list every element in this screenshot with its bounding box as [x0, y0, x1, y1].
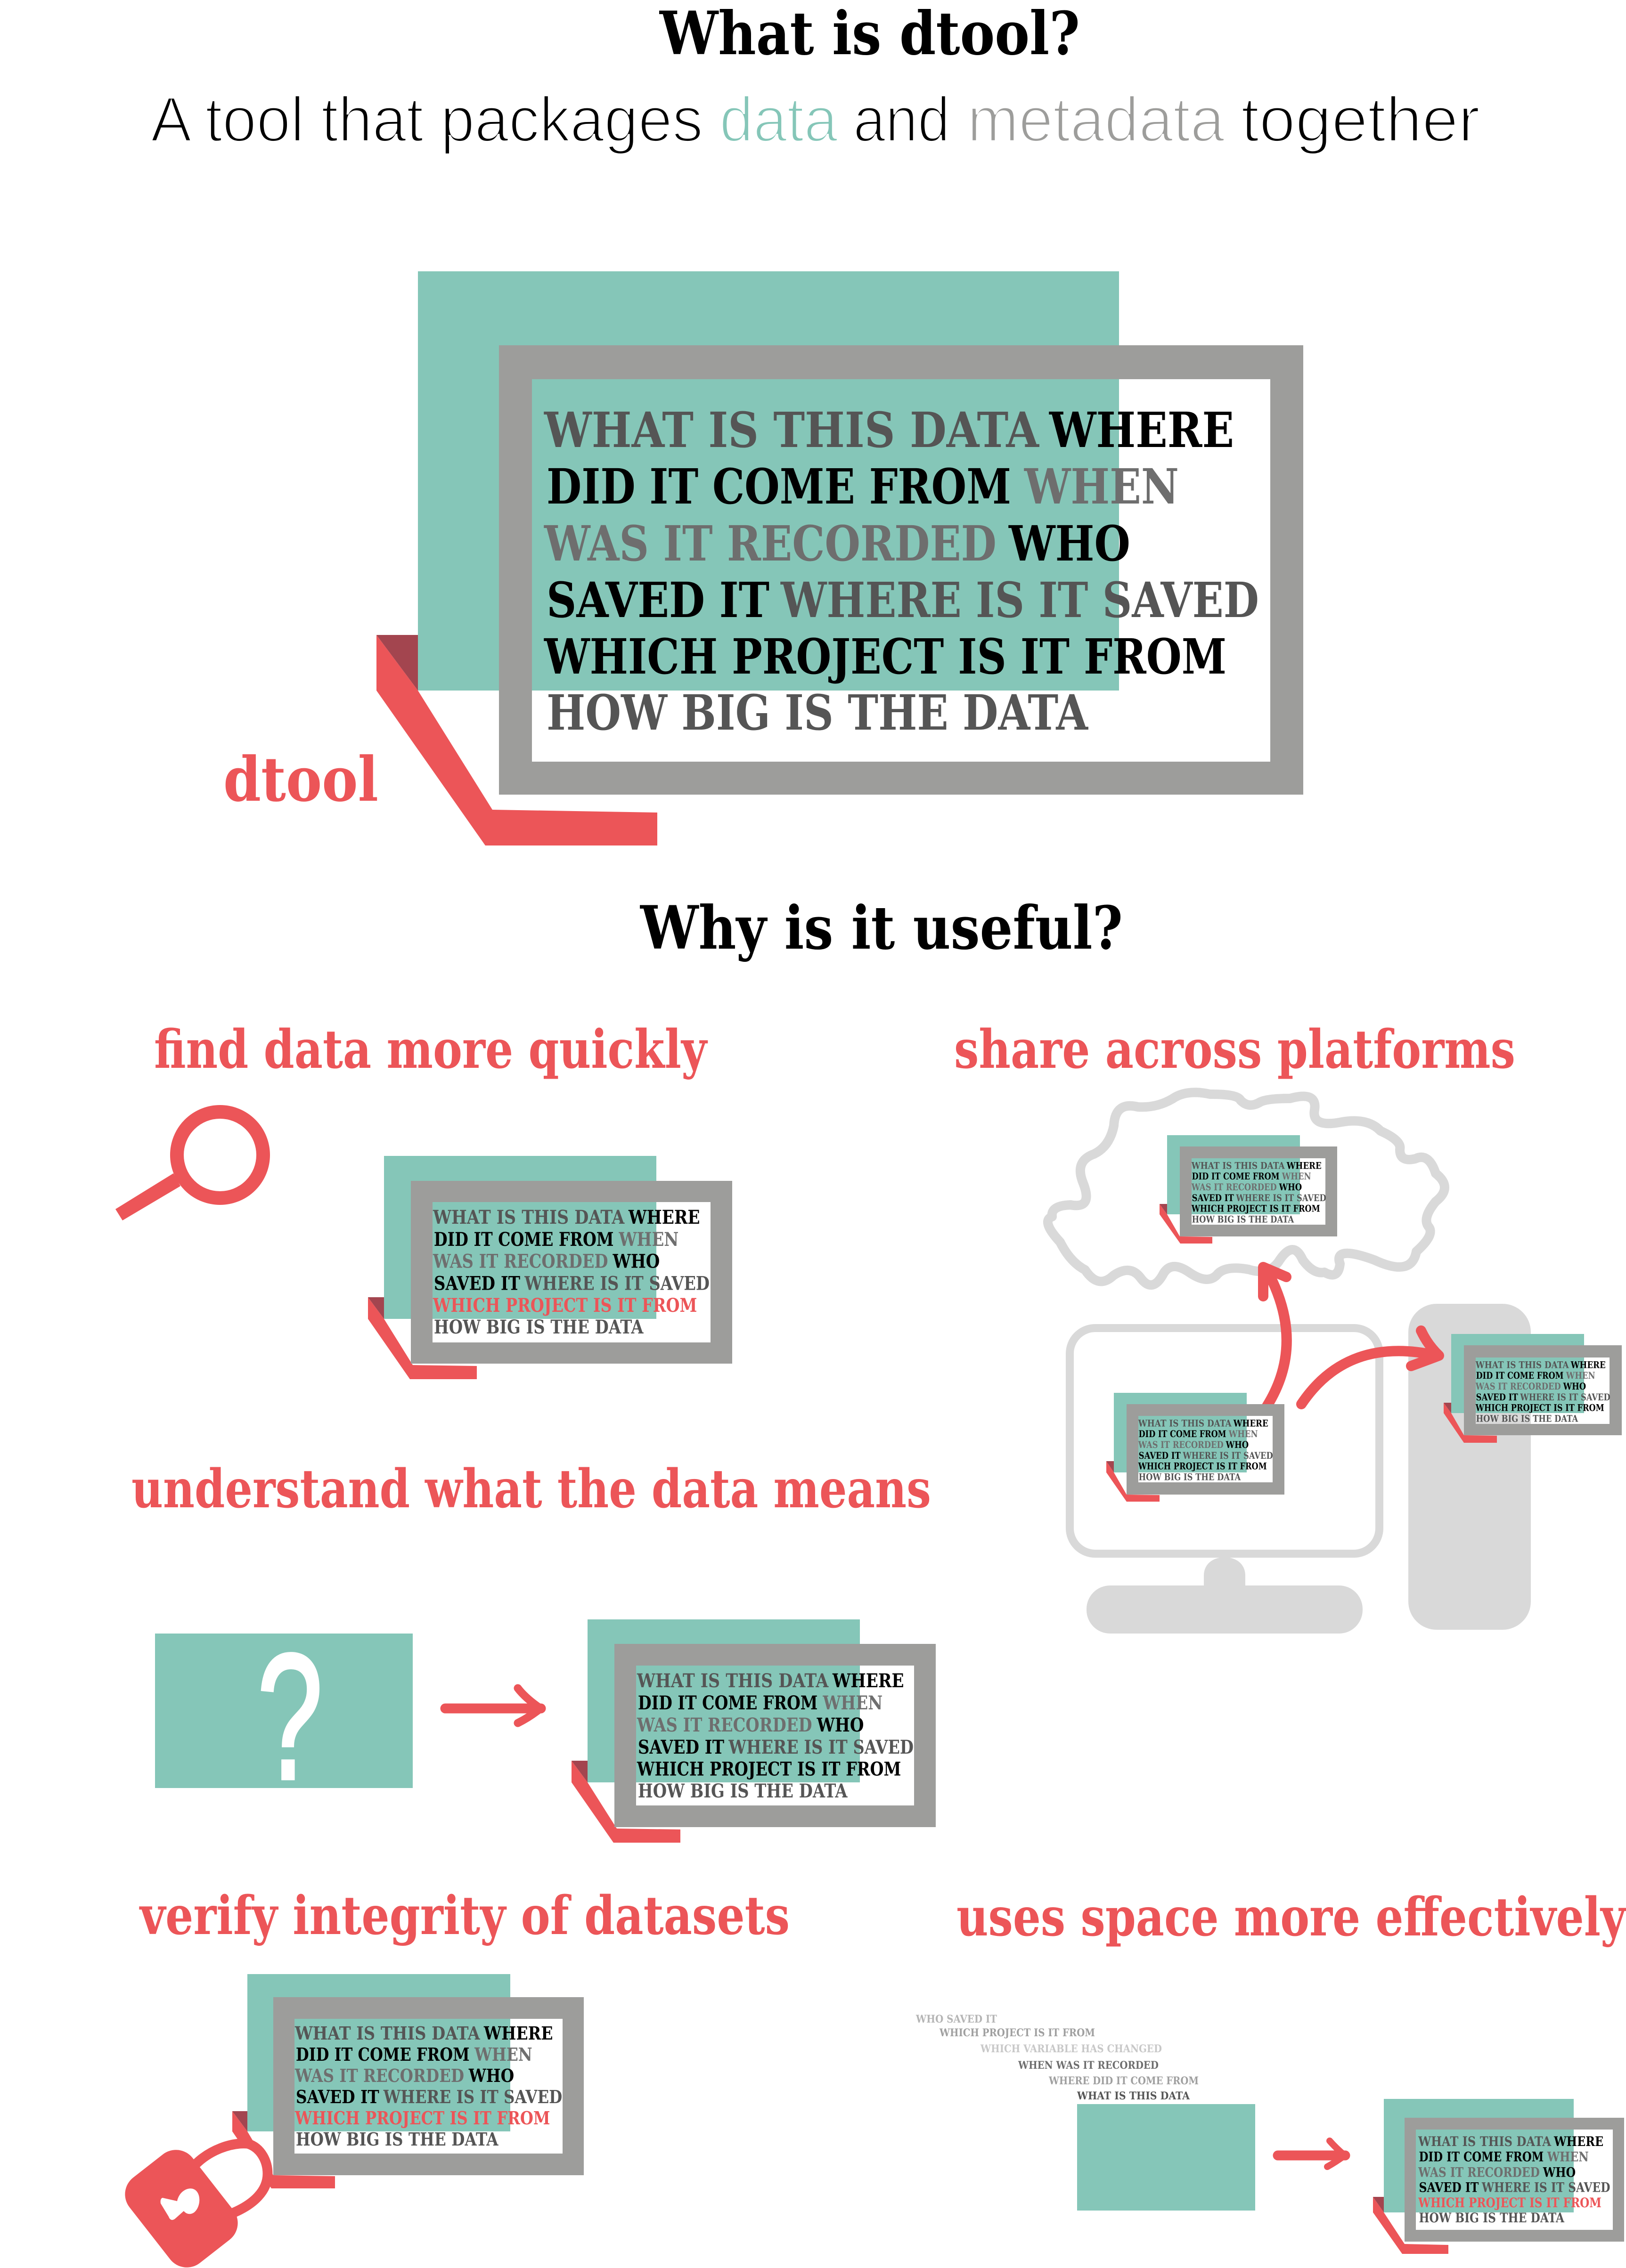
- panel: main dtool dataset diagram: [376, 271, 1303, 845]
- metadata questions: WHEN: [1566, 1370, 1595, 1381]
- scattered metadata questions: WHAT IS THIS DATA: [1077, 2090, 1190, 2102]
- metadata questions: WHAT IS THIS DATA: [1138, 1418, 1232, 1429]
- scattered metadata questions: WHICH PROJECT IS IT FROM: [939, 2027, 1095, 2039]
- metadata questions: SAVED IT: [1476, 1392, 1518, 1403]
- metadata questions: WHO: [613, 1251, 660, 1273]
- metadata questions: WHEN: [822, 1692, 882, 1714]
- metadata questions: WHICH PROJECT IS IT FROM: [637, 1758, 901, 1780]
- metadata questions: [433, 1207, 710, 1338]
- icon: monitor: [1070, 1328, 1380, 1634]
- subtitle: together: [1241, 84, 1480, 155]
- metadata questions: WHEN: [1228, 1429, 1258, 1439]
- metadata questions: WAS IT RECORDED: [637, 1714, 812, 1736]
- bracket overlap: [1373, 2197, 1384, 2212]
- metadata frame: [1464, 1345, 1622, 1435]
- metadata questions: DID IT COME FROM: [1419, 2149, 1544, 2165]
- panel: share across platforms: [1048, 1092, 1622, 1634]
- heading: verify integrity of datasets: verify integrity of datasets: [139, 1885, 790, 1947]
- metadata questions: WHO: [1543, 2164, 1576, 2180]
- metadata questions: HOW BIG IS THE DATA: [1419, 2210, 1564, 2226]
- metadata questions: DID IT COME FROM: [434, 1229, 614, 1251]
- metadata frame: [499, 345, 1303, 795]
- icon: cloud: [1048, 1092, 1445, 1285]
- metadata questions: DID IT COME FROM: [638, 1692, 818, 1714]
- metadata questions: WHERE IS IT SAVED: [1236, 1193, 1326, 1203]
- metadata questions: WAS IT RECORDED: [1475, 1381, 1561, 1392]
- panel: find data: [115, 1112, 732, 1379]
- bracket overlap: [1160, 1204, 1167, 1214]
- metadata questions: WHERE IS IT SAVED: [383, 2087, 562, 2108]
- metadata questions: WHEN: [1282, 1171, 1311, 1182]
- red dtool bracket: [1106, 1461, 1160, 1502]
- metadata questions: HOW BIG IS THE DATA: [638, 1780, 848, 1802]
- icon: tower computer: [1408, 1304, 1531, 1630]
- metadata questions: [544, 402, 1259, 741]
- scattered metadata questions: WHO SAVED IT: [915, 2013, 997, 2025]
- dataset on monitor: [1106, 1393, 1284, 1502]
- arrow: [445, 1688, 541, 1723]
- metadata questions: WHERE: [1286, 1160, 1322, 1171]
- metadata questions: SAVED IT: [1192, 1193, 1234, 1203]
- metadata questions: DID IT COME FROM: [296, 2044, 470, 2065]
- metadata questions: HOW BIG IS THE DATA: [547, 684, 1089, 741]
- metadata questions: HOW BIG IS THE DATA: [1192, 1214, 1294, 1225]
- scattered metadata questions: WHEN WAS IT RECORDED: [1018, 2059, 1159, 2072]
- red dtool bracket: [232, 2111, 335, 2188]
- metadata questions: WHEN: [618, 1229, 678, 1251]
- heading: why is it useful: Why is it useful?: [639, 893, 1123, 963]
- red dtool bracket: [1160, 1204, 1212, 1244]
- metadata questions: WHERE: [1233, 1418, 1268, 1429]
- red dtool bracket: [1373, 2197, 1448, 2254]
- heading: understand what the data means: understand what the data means: [131, 1458, 931, 1520]
- metadata questions: HOW BIG IS THE DATA: [1139, 1471, 1241, 1482]
- metadata questions: WHAT IS THIS DATA: [1475, 1359, 1569, 1370]
- arrow: monitor to cloud: [1263, 1267, 1287, 1406]
- metadata frame: [1127, 1404, 1284, 1495]
- metadata questions: WHO: [1563, 1381, 1586, 1392]
- metadata questions: WHERE IS IT SAVED: [524, 1273, 710, 1294]
- scattered metadata questions: WHERE DID IT COME FROM: [1048, 2075, 1199, 2087]
- metadata questions: SAVED IT: [638, 1736, 724, 1758]
- data rectangle: [588, 1619, 860, 1782]
- metadata questions: WHAT IS THIS DATA: [294, 2023, 481, 2044]
- metadata frame: [1180, 1146, 1337, 1236]
- metadata questions: WAS IT RECORDED: [1138, 1439, 1224, 1450]
- metadata questions: WHERE: [1553, 2134, 1603, 2149]
- metadata questions: HOW BIG IS THE DATA: [1476, 1413, 1578, 1424]
- raw data rectangle: [1077, 2104, 1255, 2211]
- metadata questions: [1191, 1160, 1326, 1225]
- red dtool bracket: [1444, 1403, 1497, 1443]
- subtitle: metadata: [967, 84, 1225, 155]
- metadata questions: WHEN: [1024, 458, 1179, 515]
- metadata questions: WHO: [817, 1714, 864, 1736]
- metadata questions: WHEN: [474, 2044, 532, 2065]
- subtitle: [151, 84, 1480, 155]
- metadata questions: WHAT IS THIS DATA: [544, 402, 1040, 459]
- red dtool bracket: [572, 1761, 680, 1843]
- scattered metadata questions: [915, 2013, 1199, 2102]
- metadata questions: [1475, 1359, 1610, 1424]
- panel: uses space effectively: [915, 2013, 1624, 2254]
- metadata questions: WHERE: [1570, 1359, 1606, 1370]
- metadata questions: SAVED IT: [1139, 1450, 1181, 1461]
- metadata questions: WHO: [1008, 515, 1130, 572]
- metadata questions: WHAT IS THIS DATA: [1418, 2134, 1551, 2149]
- metadata frame: [273, 1997, 584, 2175]
- data rectangle: [1384, 2099, 1574, 2212]
- metadata questions: WHERE IS IT SAVED: [1183, 1450, 1273, 1461]
- metadata questions: DID IT COME FROM: [547, 458, 1011, 515]
- subtitle: data: [719, 84, 838, 155]
- metadata questions: SAVED IT: [296, 2087, 379, 2108]
- metadata questions: WHO: [468, 2065, 514, 2087]
- metadata questions: WHEN: [1547, 2149, 1589, 2165]
- metadata questions: WHERE: [628, 1207, 700, 1228]
- red dtool bracket: [368, 1297, 477, 1379]
- panel: verify integrity: [116, 1974, 584, 2268]
- metadata questions: WHERE IS IT SAVED: [1520, 1392, 1610, 1403]
- metadata questions: [1138, 1418, 1273, 1482]
- bracket overlap: [232, 2111, 247, 2131]
- metadata questions: WHAT IS THIS DATA: [1191, 1160, 1285, 1171]
- subtitle: and: [853, 84, 950, 155]
- metadata questions: DID IT COME FROM: [1476, 1370, 1564, 1381]
- metadata questions: WHAT IS THIS DATA: [637, 1670, 829, 1692]
- metadata frame: [1405, 2118, 1624, 2242]
- metadata questions: SAVED IT: [547, 572, 769, 629]
- unknown data rectangle with question mark: [155, 1617, 413, 1817]
- metadata questions: WHICH PROJECT IS IT FROM: [544, 628, 1226, 685]
- metadata questions: WAS IT RECORDED: [294, 2065, 464, 2087]
- metadata questions: WHERE: [483, 2023, 553, 2044]
- heading: share across platforms: share across platforms: [954, 1019, 1515, 1081]
- metadata questions: DID IT COME FROM: [1139, 1429, 1226, 1439]
- scattered metadata questions: WHICH VARIABLE HAS CHANGED: [980, 2043, 1162, 2055]
- bracket overlap: [368, 1297, 384, 1319]
- metadata questions: HOW BIG IS THE DATA: [434, 1317, 644, 1338]
- bracket overlap: [1444, 1403, 1451, 1413]
- bracket overlap: [1106, 1461, 1114, 1472]
- metadata questions: [637, 1670, 914, 1802]
- metadata questions: WHICH PROJECT IS IT FROM: [433, 1295, 697, 1317]
- subtitle: A tool that packages: [151, 84, 703, 155]
- metadata frame: [411, 1181, 732, 1364]
- metadata questions: [294, 2023, 562, 2150]
- bracket overlap: [572, 1761, 588, 1782]
- metadata questions: WHO: [1226, 1439, 1249, 1450]
- dataset in cloud: [1160, 1135, 1337, 1244]
- metadata questions: WHERE IS IT SAVED: [728, 1736, 914, 1758]
- metadata questions: WHICH PROJECT IS IT FROM: [294, 2108, 550, 2129]
- data rectangle: [384, 1156, 656, 1319]
- unknown data rectangle with question mark: ?: [257, 1617, 323, 1817]
- data rectangle: [1114, 1393, 1247, 1472]
- metadata questions: WHAT IS THIS DATA: [433, 1207, 625, 1228]
- metadata questions: WAS IT RECORDED: [1418, 2164, 1540, 2180]
- data rectangle: [1451, 1334, 1584, 1413]
- metadata questions: WAS IT RECORDED: [433, 1251, 608, 1273]
- metadata questions: WAS IT RECORDED: [544, 515, 997, 572]
- metadata questions: WHERE: [1049, 402, 1234, 459]
- bracket overlap: [376, 635, 418, 691]
- arrow: [1278, 2141, 1345, 2167]
- icon: padlock: [116, 2141, 268, 2268]
- metadata questions: DID IT COME FROM: [1192, 1171, 1280, 1182]
- metadata questions: SAVED IT: [1419, 2180, 1479, 2195]
- metadata questions: WHO: [1279, 1182, 1302, 1193]
- dataset on tower: [1444, 1334, 1622, 1443]
- dtool label: dtool: [223, 743, 378, 815]
- data rectangle: [247, 1974, 510, 2131]
- metadata frame: [614, 1644, 936, 1827]
- metadata questions: WHERE IS IT SAVED: [780, 572, 1259, 629]
- data rectangle: [1167, 1135, 1300, 1214]
- metadata questions: WHERE: [832, 1670, 904, 1692]
- metadata questions: WHICH PROJECT IS IT FROM: [1138, 1461, 1267, 1472]
- metadata questions: WAS IT RECORDED: [1191, 1182, 1277, 1193]
- metadata questions: [1418, 2134, 1610, 2226]
- red dtool bracket: [376, 635, 657, 845]
- metadata questions: SAVED IT: [434, 1273, 520, 1294]
- arrow: monitor to tower: [1301, 1331, 1439, 1404]
- metadata questions: WHICH PROJECT IS IT FROM: [1191, 1203, 1320, 1214]
- title: What is dtool?: [659, 0, 1080, 68]
- panel: understand data: [155, 1617, 936, 1843]
- metadata questions: HOW BIG IS THE DATA: [296, 2129, 498, 2150]
- metadata questions: WHICH PROJECT IS IT FROM: [1475, 1403, 1604, 1414]
- icon: magnifying glass: [115, 1112, 263, 1220]
- data rectangle: [418, 271, 1119, 691]
- heading: find data more quickly: find data more quickly: [154, 1019, 708, 1081]
